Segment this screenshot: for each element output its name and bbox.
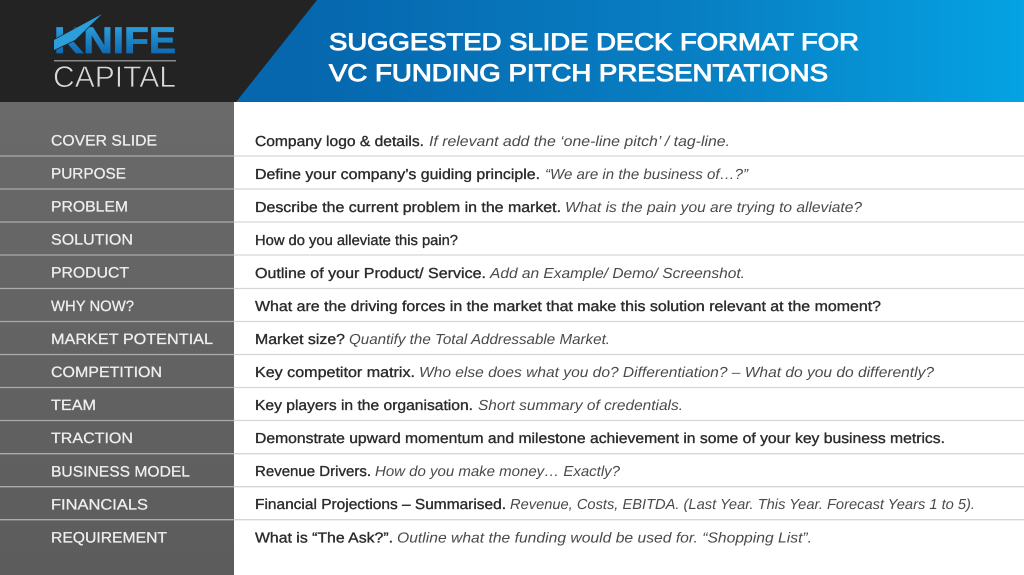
row: competition: Key competitor matrix.: [255, 365, 415, 381]
row: team: Short summary of credentials.: [478, 398, 683, 414]
row: cover slide: If relevant add the ‘one-line pitch’ / tag-line.: [429, 134, 730, 150]
panel: descriptions: [255, 133, 975, 546]
section label list: TRACTION: [51, 430, 133, 447]
section label list: PROBLEM: [51, 198, 128, 216]
row: product: Add an Example/ Demo/ Screenshot.: [489, 266, 745, 282]
row: market potential: Quantify the Total Addressable Market.: [349, 332, 610, 348]
title: VC FUNDING PITCH PRESENTATIONS: [329, 60, 828, 87]
header banner: [0, 0, 1024, 102]
section label list: COVER SLIDE: [51, 132, 157, 149]
row: business model: Revenue Drivers.: [255, 464, 371, 480]
logo wordmark CAPITAL: CAPITAL: [53, 61, 176, 94]
section label list: BUSINESS MODEL: [51, 463, 190, 480]
row: market potential: Market size?: [255, 332, 345, 348]
row: problem: Describe the current problem in the market.: [255, 200, 561, 216]
section label list: REQUIREMENT: [51, 530, 167, 546]
section label list: PRODUCT: [51, 265, 129, 282]
logo: Knife Capital: [53, 14, 176, 94]
row: problem: What is the pain you are trying to alleviate?: [565, 200, 863, 216]
row: business model: How do you make money… Exactly?: [375, 464, 621, 480]
row: financials: Financial Projections – Summarised.: [255, 497, 506, 513]
row: cover slide: Company logo & details.: [255, 134, 424, 150]
row: competition: Who else does what you do? Differentiation? – What do you do differently?: [419, 365, 935, 381]
logo wordmark KNIFE: KNIFE: [54, 20, 176, 61]
title: SUGGESTED SLIDE DECK FORMAT FOR: [329, 29, 859, 56]
row: product: Outline of your Product/ Service.: [255, 266, 486, 282]
section label list: MARKET POTENTIAL: [51, 331, 213, 348]
panel: section labels: [0, 102, 234, 575]
section label list: FINANCIALS: [51, 496, 148, 513]
row: requirement: What is “The Ask?”.: [255, 530, 393, 546]
section label list: PURPOSE: [51, 165, 126, 182]
title: [329, 29, 859, 87]
row: purpose: “We are in the business of…?”: [545, 167, 749, 183]
section label list: WHY NOW?: [51, 298, 134, 315]
logo blade: [54, 14, 102, 50]
row: requirement: Outline what the funding would be used for. “Shopping List”.: [397, 530, 812, 546]
logo rule: [54, 60, 176, 62]
row: solution: How do you alleviate this pain?: [255, 233, 458, 249]
section label list: COMPETITION: [51, 364, 162, 381]
row: traction: Demonstrate upward momentum and milestone achievement in some of your key business metrics.: [255, 431, 945, 447]
row: why now: What are the driving forces in the market that make this solution relevant at the moment?: [255, 299, 881, 315]
section label list: TEAM: [51, 397, 96, 414]
section label list: [51, 132, 213, 547]
row: team: Key players in the organisation.: [255, 398, 473, 414]
row: financials: Revenue, Costs, EBITDA. (Last Year. This Year. Forecast Years 1 to 5).: [510, 497, 975, 513]
row: purpose: Define your company’s guiding principle.: [255, 167, 540, 183]
section label list: SOLUTION: [51, 232, 133, 249]
